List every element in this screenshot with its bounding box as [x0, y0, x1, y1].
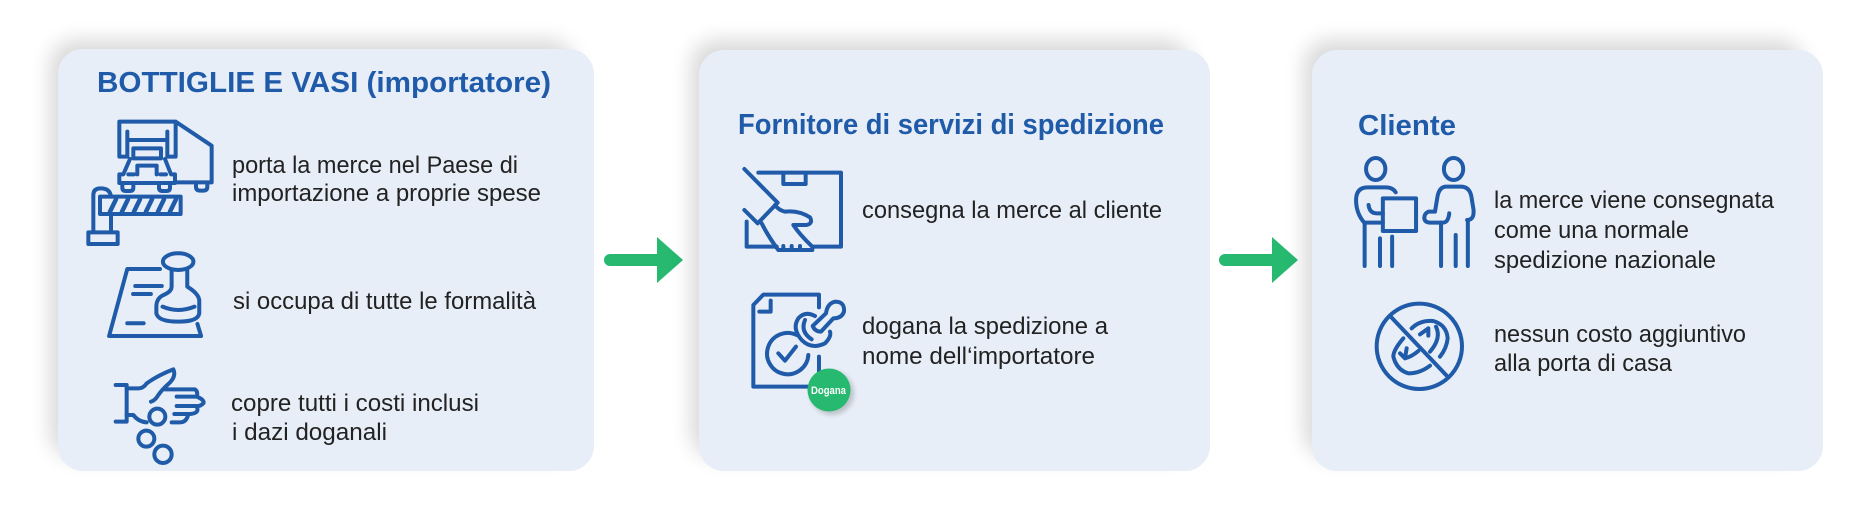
text: no additional cost: [1494, 321, 1746, 377]
heading: shipping provider: Fornitore di servizi di spedizione: [738, 109, 1164, 141]
icon: stamp on paper: [109, 253, 201, 336]
text: delivers: consegna la merce al cliente: [862, 197, 1162, 224]
text: covers costs: [231, 390, 479, 446]
text: delivered as domestic shipment: la merce viene consegnata: [1494, 187, 1775, 214]
text: covers costs: i dazi doganali: [232, 419, 387, 446]
text: delivered as domestic shipment: spedizione nazionale: [1494, 247, 1716, 274]
icon: hand with coins: [116, 369, 204, 463]
text: no additional cost: nessun costo aggiuntivo: [1494, 321, 1746, 348]
text: delivered as domestic shipment: [1494, 187, 1775, 274]
text: covers costs: copre tutti i costi inclusi: [231, 390, 479, 417]
badge: Dogana: [808, 368, 854, 415]
text: no additional cost: alla porta di casa: [1494, 350, 1673, 377]
text: clears shipment: nome dell‘importatore: [862, 343, 1095, 370]
icon: hand with box: [744, 169, 841, 250]
text: clears shipment: dogana la spedizione a: [862, 313, 1109, 340]
text: brings goods: porta la merce nel Paese di: [232, 152, 518, 179]
panel: customer: [1304, 40, 1823, 471]
icon: truck at barrier: [88, 122, 212, 244]
icon: customs document: [753, 295, 844, 387]
panel: shipping provider: [691, 40, 1210, 471]
text: formalities: si occupa di tutte le formalità: [233, 288, 537, 315]
text: clears shipment: [862, 313, 1109, 370]
icon: two people with parcel: [1356, 158, 1474, 266]
text: brings goods: importazione a proprie spese: [232, 180, 541, 207]
heading: importer: BOTTIGLIE E VASI (importatore): [97, 67, 551, 99]
arrow: importer to provider: [604, 237, 683, 283]
icon: no extra cost: [1377, 304, 1462, 389]
heading: customer: Cliente: [1358, 110, 1456, 142]
arrow: provider to customer: [1219, 237, 1298, 283]
text: delivered as domestic shipment: come una normale: [1494, 217, 1689, 244]
panel: importer: [50, 40, 594, 471]
text: brings goods: [232, 152, 541, 207]
badge: Dogana: Dogana: [811, 385, 847, 397]
